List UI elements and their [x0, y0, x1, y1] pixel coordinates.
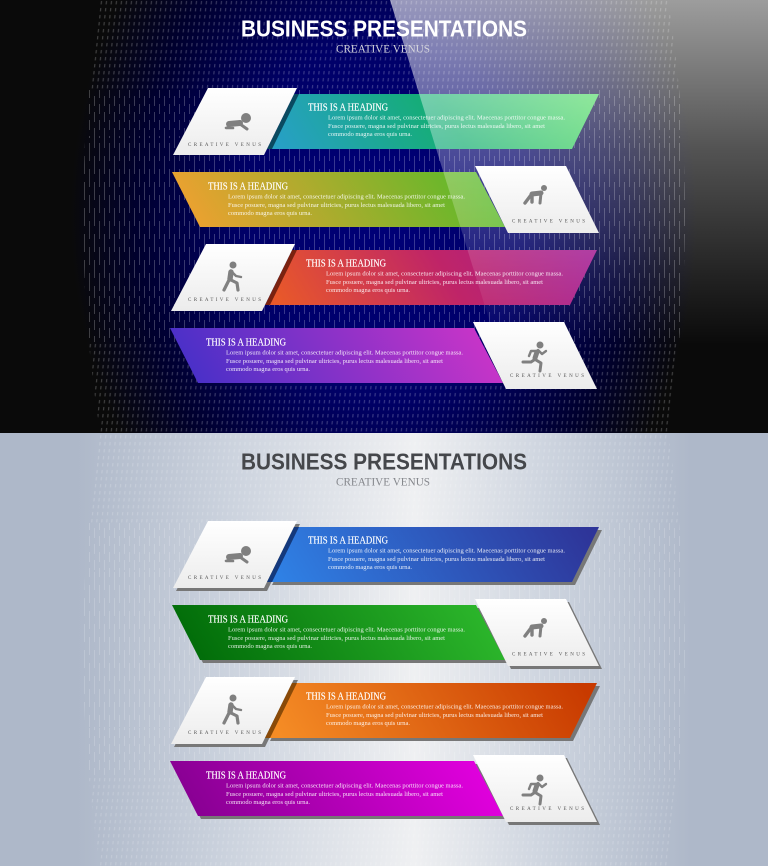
text block 2 light: Lorem ipsum dolor sit amet, consectetuer adipiscing elit. Maecenas porttitor congue massa. [228, 627, 465, 634]
card 1 light [173, 521, 299, 588]
icon: running person [523, 342, 546, 371]
text block 3 dark: Lorem ipsum dolor sit amet, consectetuer adipiscing elit. Maecenas porttitor congue massa. [326, 270, 563, 277]
text block 1 dark: Lorem ipsum dolor sit amet, consectetuer adipiscing elit. Maecenas porttitor congue massa. [328, 114, 565, 121]
text block 4 light: Lorem ipsum dolor sit amet, consectetuer adipiscing elit. Maecenas porttitor congue massa. [226, 783, 463, 790]
text block 4 light: commodo magna eros quis urna. [226, 799, 310, 806]
icon: walking person [224, 694, 241, 723]
text block 1 dark [308, 102, 565, 138]
text block 2 dark: Fusce posuere, magna sed pulvinar ultricies, purus lectus malesuada libero, sit amet [228, 202, 445, 209]
banner 4 light [170, 761, 503, 816]
banner 2 light [172, 605, 505, 660]
banner 4 [170, 328, 503, 383]
title dark: BUSINESS PRESENTATIONS [241, 16, 527, 42]
text block 4 dark: Fusce posuere, magna sed pulvinar ultricies, purus lectus malesuada libero, sit amet [226, 358, 443, 365]
text block 4 dark: commodo magna eros quis urna. [226, 366, 310, 373]
card label: CREATIVE VENUS [510, 807, 584, 812]
text block 2 light [208, 614, 465, 650]
card 4 dark [473, 322, 597, 389]
card label: CREATIVE VENUS [512, 220, 585, 224]
card 3 light [171, 677, 297, 744]
panel: light variant [170, 448, 599, 822]
text block 4 dark: THIS IS A HEADING [206, 338, 286, 348]
text block 2 light: THIS IS A HEADING [208, 614, 288, 626]
text block 3 light: Lorem ipsum dolor sit amet, consectetuer adipiscing elit. Maecenas porttitor congue massa. [326, 703, 563, 710]
text block 2 dark: commodo magna eros quis urna. [228, 210, 312, 217]
text block 3 light: commodo magna eros quis urna. [326, 720, 410, 727]
banner 1 [267, 94, 599, 149]
text block 2 light: commodo magna eros quis urna. [228, 643, 312, 650]
subtitle dark: CREATIVE VENUS [336, 42, 430, 56]
icon: crawling adult [525, 185, 547, 203]
text block 3 light [306, 692, 563, 727]
text block 4 dark [206, 338, 463, 373]
text block 4 dark: Lorem ipsum dolor sit amet, consectetuer adipiscing elit. Maecenas porttitor congue massa. [226, 350, 463, 357]
banner 2 [172, 172, 505, 227]
card 3 dark [171, 244, 295, 311]
text block 3 light: THIS IS A HEADING [306, 692, 386, 702]
text block 3 dark: THIS IS A HEADING [306, 258, 386, 270]
text block 3 dark: commodo magna eros quis urna. [326, 287, 410, 294]
text block 1 light: Fusce posuere, magna sed pulvinar ultricies, purus lectus malesuada libero, sit amet [328, 556, 545, 563]
text block 2 dark [208, 182, 465, 217]
card label: CREATIVE VENUS [188, 731, 261, 736]
title light: BUSINESS PRESENTATIONS [241, 448, 527, 474]
text block 4 light: THIS IS A HEADING [206, 770, 286, 782]
panel: dark variant banners [170, 94, 599, 383]
card 2 light [475, 599, 599, 666]
text block 4 light: Fusce posuere, magna sed pulvinar ultricies, purus lectus malesuada libero, sit amet [226, 791, 443, 798]
dark background panel [84, 0, 685, 433]
text block 2 dark: Lorem ipsum dolor sit amet, consectetuer adipiscing elit. Maecenas porttitor congue massa. [228, 194, 465, 201]
diagonal light overlay [390, 0, 768, 345]
icon: crawling baby [226, 546, 251, 562]
text block 1 dark: Fusce posuere, magna sed pulvinar ultricies, purus lectus malesuada libero, sit amet [328, 123, 545, 130]
card label: CREATIVE VENUS [510, 374, 584, 379]
subtitle light: CREATIVE VENUS [336, 474, 430, 488]
text block 1 dark: THIS IS A HEADING [308, 102, 388, 114]
text block 2 dark: THIS IS A HEADING [208, 182, 288, 192]
card label: CREATIVE VENUS [512, 652, 585, 658]
text block 1 dark: commodo magna eros quis urna. [328, 131, 412, 138]
card 2 dark [475, 166, 599, 233]
text block 3 dark: Fusce posuere, magna sed pulvinar ultricies, purus lectus malesuada libero, sit amet [326, 279, 543, 286]
banner 3 [265, 250, 597, 305]
banner 1 light [269, 527, 599, 582]
icon: walking person [224, 262, 241, 290]
card 1 dark [173, 88, 297, 155]
text block 1 light [308, 536, 565, 571]
text block 1 light: commodo magna eros quis urna. [328, 564, 412, 571]
card label: CREATIVE VENUS [188, 298, 261, 303]
text block 1 light: Lorem ipsum dolor sit amet, consectetuer adipiscing elit. Maecenas porttitor congue massa. [328, 547, 565, 554]
card label: CREATIVE VENUS [188, 143, 261, 148]
text block 4 light [206, 770, 463, 806]
banner 3 light [267, 683, 597, 738]
text block 3 light: Fusce posuere, magna sed pulvinar ultricies, purus lectus malesuada libero, sit amet [326, 712, 543, 719]
icon: crawling adult [525, 618, 547, 636]
card label: CREATIVE VENUS [188, 576, 261, 581]
icon: crawling baby [226, 113, 251, 129]
text block 3 dark [306, 258, 563, 294]
card 4 light [473, 755, 597, 822]
text block 2 light: Fusce posuere, magna sed pulvinar ultricies, purus lectus malesuada libero, sit amet [228, 635, 445, 642]
light background panel [0, 433, 768, 866]
icon: running person [523, 774, 546, 804]
text block 1 light: THIS IS A HEADING [308, 536, 388, 546]
